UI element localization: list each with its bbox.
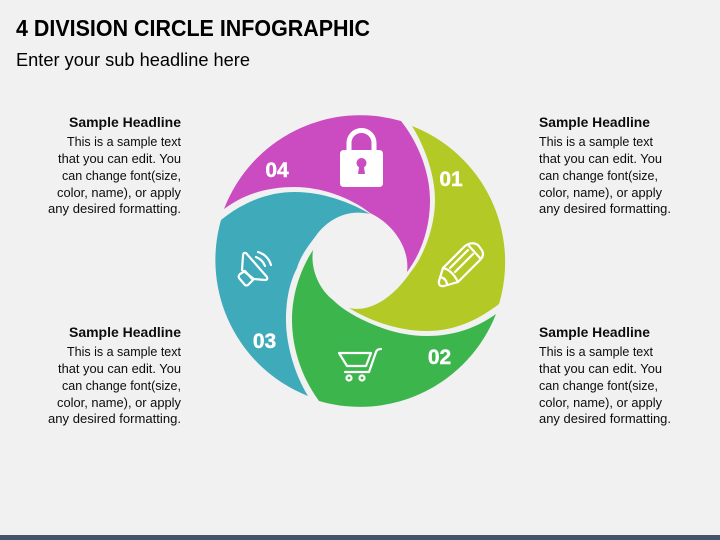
body text: any desired formatting.	[48, 411, 181, 426]
headline: Sample Headline	[539, 325, 650, 340]
number 04: 04	[265, 159, 289, 182]
icon: shopping cart	[339, 349, 381, 380]
title: 4 DIVISION CIRCLE INFOGRAPHIC	[16, 15, 370, 41]
number 02: 02	[428, 346, 451, 369]
body text: color, name), or apply	[57, 185, 181, 200]
body text: can change font(size,	[62, 378, 181, 393]
body text: This is a sample text	[67, 134, 181, 149]
headline: Sample Headline	[69, 325, 182, 340]
body text: color, name), or apply	[57, 395, 181, 410]
headline: Sample Headline	[539, 115, 650, 130]
body text: any desired formatting.	[539, 201, 671, 216]
body text: color, name), or apply	[539, 185, 662, 200]
subtitle: Enter your sub headline here	[16, 50, 250, 70]
body text	[48, 134, 181, 216]
body text: can change font(size,	[539, 378, 658, 393]
text block: top left	[48, 115, 182, 216]
body text	[48, 344, 181, 426]
icon: pencil	[439, 243, 483, 286]
body text: that you can edit. You	[539, 151, 662, 166]
body text	[539, 344, 671, 426]
body text: that you can edit. You	[58, 361, 181, 376]
number 01: 01	[439, 168, 463, 191]
teal swirl shape	[215, 192, 370, 396]
segment 04: magenta	[224, 115, 430, 272]
green swirl shape	[292, 250, 496, 407]
body text: that you can edit. You	[58, 151, 181, 166]
text block: bottom left	[48, 325, 182, 426]
number 03: 03	[253, 330, 276, 353]
magenta swirl shape	[224, 115, 430, 272]
headline: Sample Headline	[69, 115, 182, 130]
body text: any desired formatting.	[48, 201, 181, 216]
icon: speaker	[239, 252, 271, 286]
body text: This is a sample text	[67, 344, 181, 359]
body text: color, name), or apply	[539, 395, 662, 410]
body text: any desired formatting.	[539, 411, 671, 426]
text block: top right	[539, 115, 671, 216]
icon: padlock	[340, 130, 383, 187]
body text: can change font(size,	[539, 168, 658, 183]
body text: This is a sample text	[539, 344, 653, 359]
footer bar	[0, 535, 720, 540]
body text: can change font(size,	[62, 168, 181, 183]
segment 01: lime	[349, 126, 505, 331]
segment 03: teal	[215, 192, 370, 396]
lime swirl shape	[349, 126, 505, 331]
segment 02: green	[292, 250, 496, 407]
body text: This is a sample text	[539, 134, 653, 149]
body text: that you can edit. You	[539, 361, 662, 376]
body text	[539, 134, 671, 216]
text block: bottom right	[539, 325, 671, 426]
